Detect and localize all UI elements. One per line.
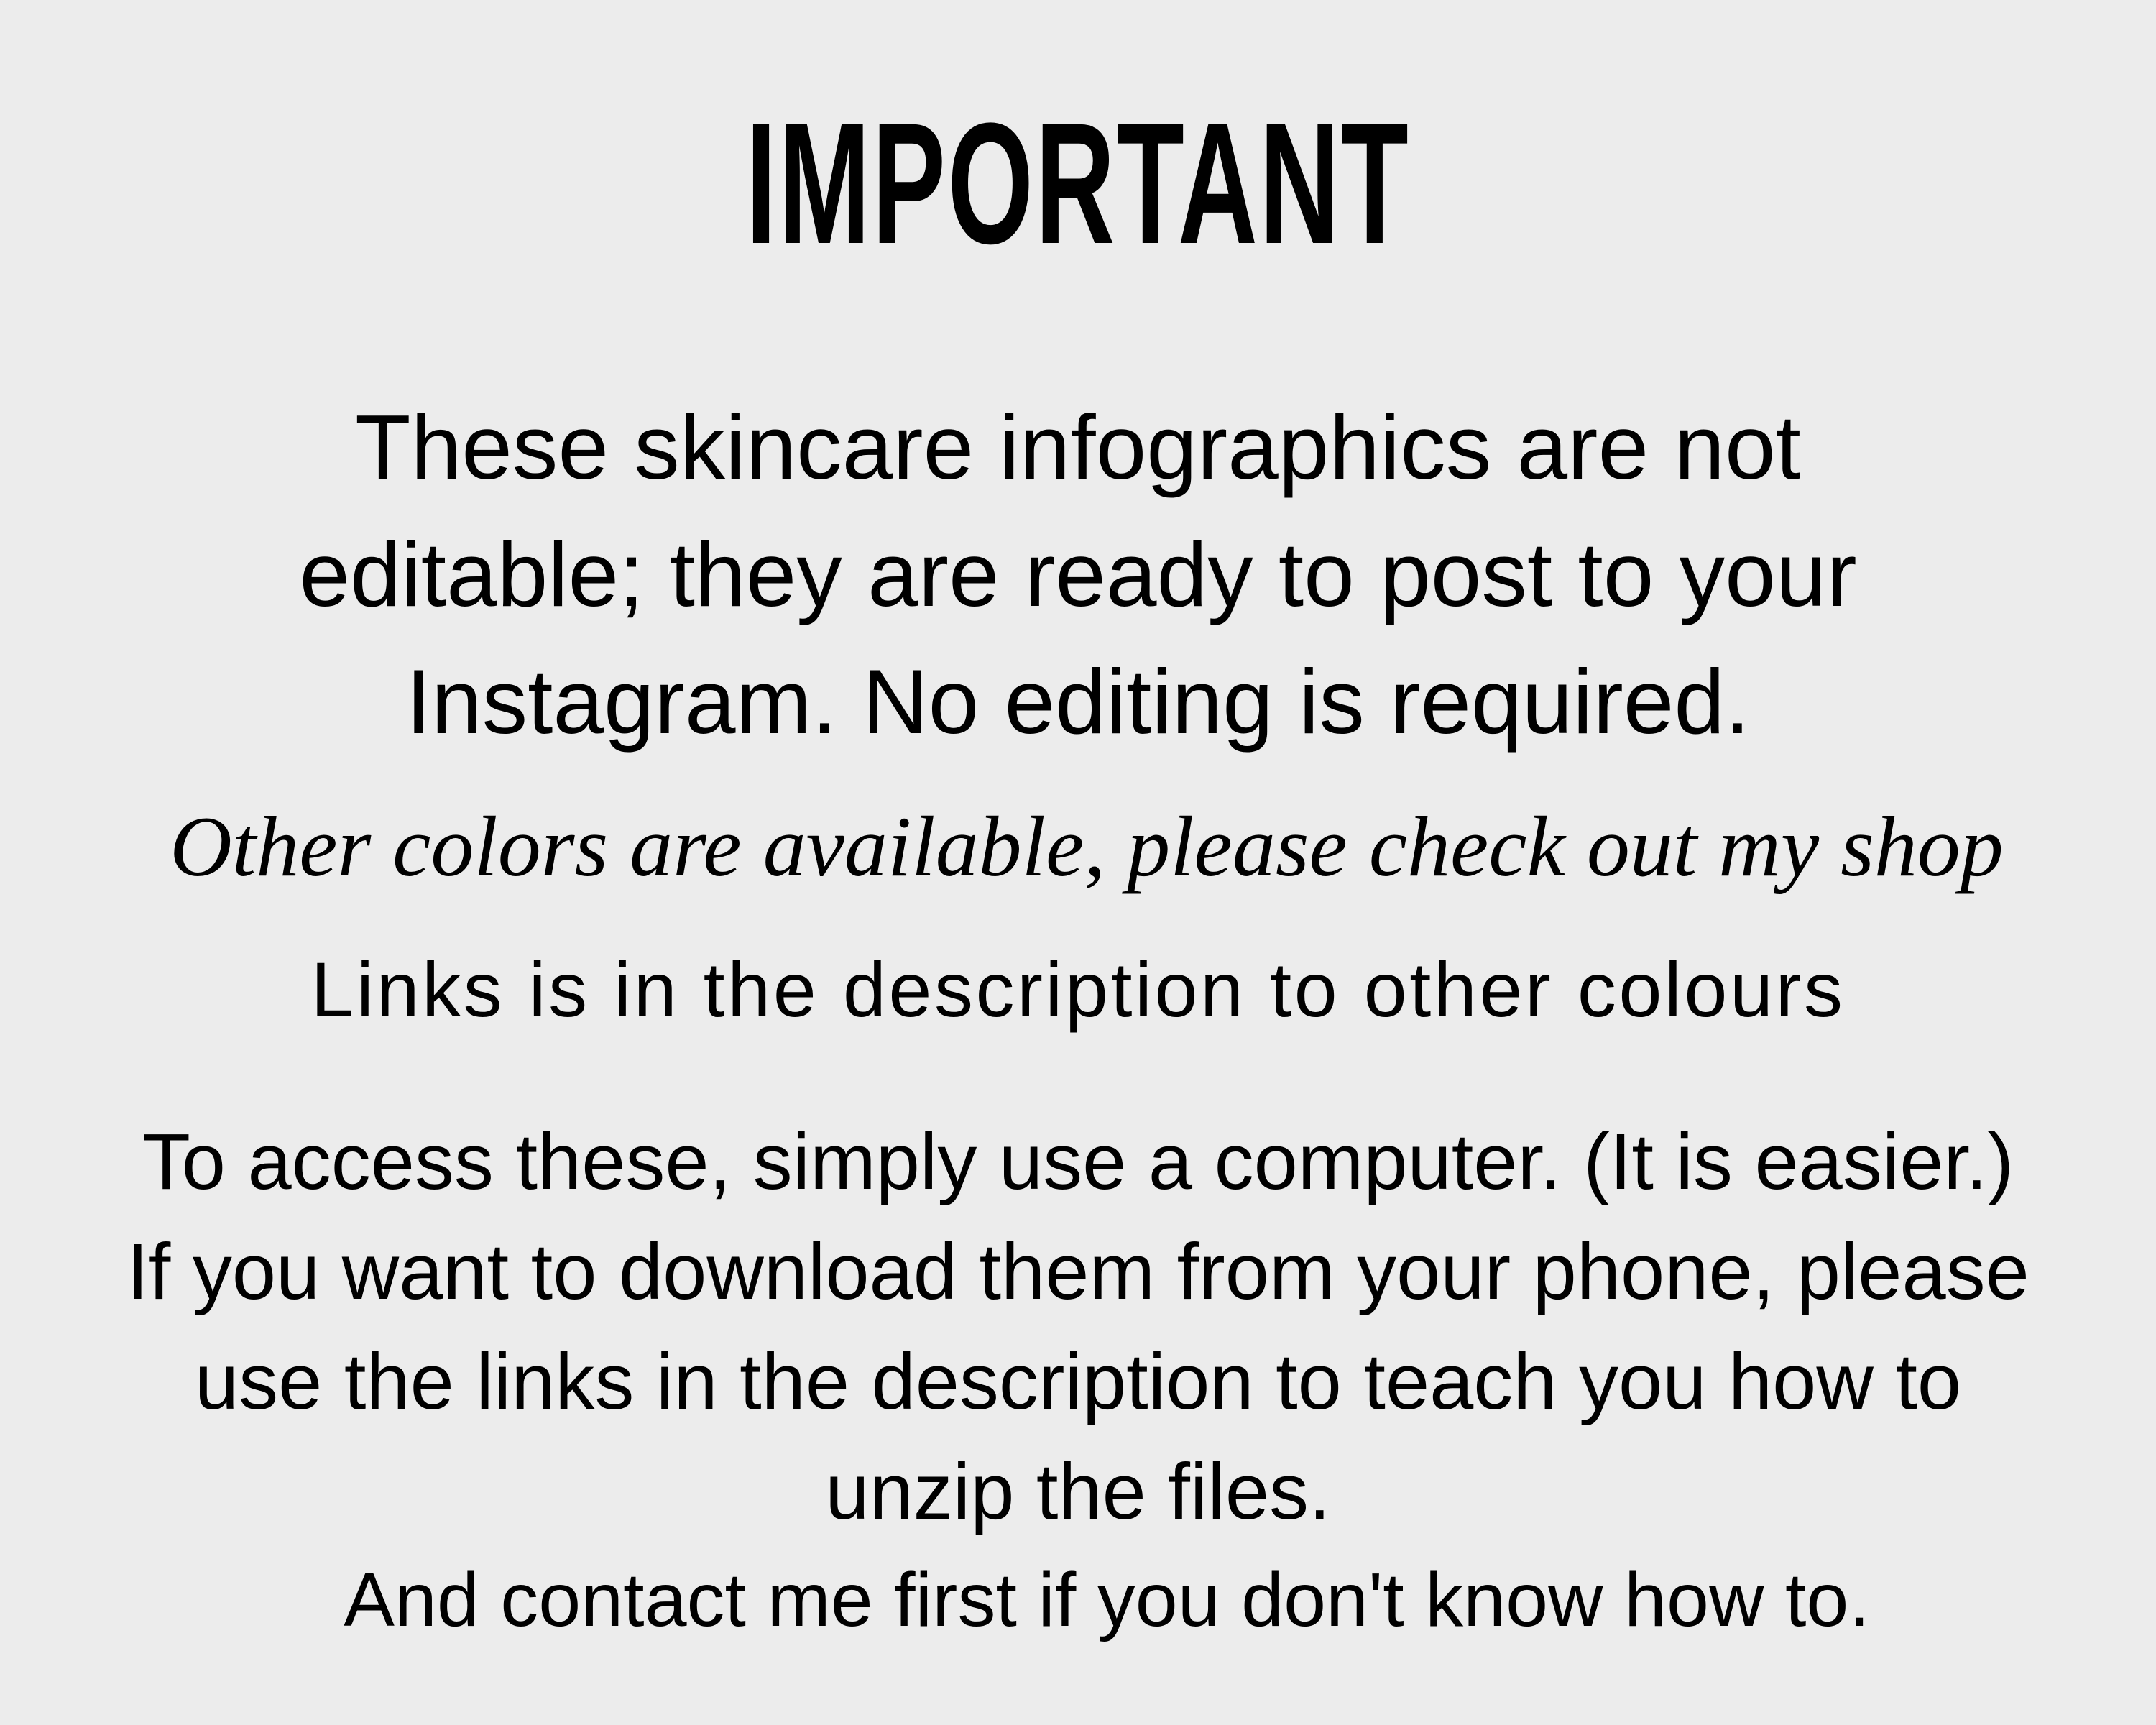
text block: access instructions: unzip the files. [825,1448,1331,1536]
text block: access instructions: And contact me first if you don't know how to. [344,1558,1870,1642]
text block: not editable notice: editable; they are ready to post to your [299,523,1857,625]
text block: not editable notice: Instagram. No editing is required. [406,650,1750,753]
text block: access instructions: To access these, simply use a computer. (It is easier.) [142,1118,2014,1206]
text: links line: Links is in the description to other colours [310,946,1846,1033]
title: IMPORTANT [746,87,1410,280]
text block: not editable notice: These skincare infographics are not [355,396,1801,498]
text block: not editable notice [299,396,1857,753]
script line: other colors: Other colors are available, please check out my shop [170,799,2004,894]
text block: access instructions [126,1118,2030,1642]
text block: access instructions: use the links in the description to teach you how to [195,1338,1961,1426]
text block: access instructions: If you want to download them from your phone, please [126,1228,2030,1316]
